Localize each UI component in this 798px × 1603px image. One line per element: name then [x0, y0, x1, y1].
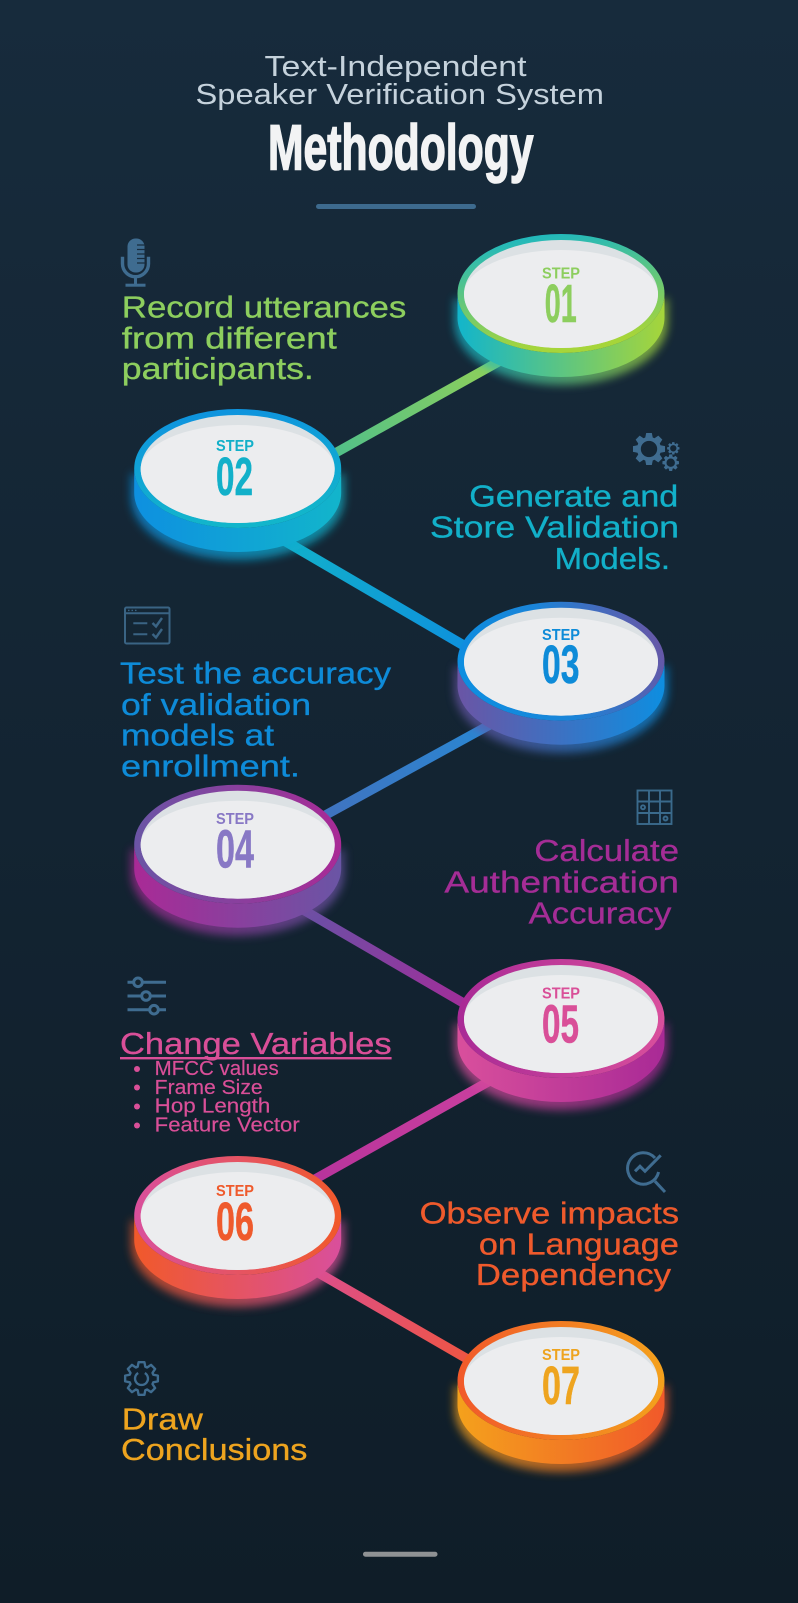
connector 4 to 5 [300, 908, 472, 1008]
variable list: Frame Size [155, 1077, 263, 1099]
step 01 disk: STEP [542, 265, 580, 282]
step 01 text: from different [122, 321, 337, 355]
step 04 text: Accuracy [529, 896, 672, 930]
step 02 text [430, 480, 679, 576]
step 07 disk [458, 1321, 664, 1469]
step 01 disk [458, 234, 664, 382]
title block [196, 51, 604, 184]
icon: checklist window [125, 608, 170, 644]
step 07 text [121, 1402, 307, 1467]
bottom bar [363, 1552, 438, 1557]
step 07 disk: STEP [542, 1347, 580, 1364]
step 04 text: Calculate [534, 834, 679, 868]
step 06 text [420, 1196, 679, 1292]
step 02 disk: STEP [216, 438, 254, 455]
icon: analytics magnifier [628, 1153, 665, 1192]
step 04 disk: 04 [216, 819, 254, 879]
connector lines [285, 361, 500, 1364]
step 03 text [120, 656, 392, 784]
step 06 text: Dependency [476, 1258, 672, 1292]
step 05 disk [458, 959, 664, 1107]
icon: gears [633, 433, 680, 471]
connector 3 to 4 [322, 722, 495, 817]
icon: gear outline [125, 1362, 158, 1395]
icon: microphone [122, 238, 148, 287]
variable list: MFCC values [155, 1058, 279, 1080]
connector 6 to 7 [310, 1268, 476, 1364]
step 02 text: Models. [555, 542, 670, 576]
heading: Methodology [268, 112, 534, 184]
icon: grid [638, 790, 672, 824]
step 01 text [122, 290, 406, 386]
step 01 text: participants. [122, 352, 314, 386]
title divider [316, 204, 476, 209]
step 04 text [444, 834, 679, 930]
step 07 disk: 07 [542, 1356, 580, 1416]
step 06 disk: STEP [216, 1183, 254, 1200]
step 03 text: of validation [121, 688, 311, 722]
variable list: Feature Vector [155, 1115, 300, 1137]
variable list: Hop Length [155, 1096, 270, 1118]
variable list [134, 1058, 300, 1137]
step 03 disk: STEP [542, 627, 580, 644]
subtitle line 2: Speaker Verification System [196, 79, 604, 111]
step 07 text: Conclusions [121, 1433, 307, 1467]
step 01 disk: 01 [545, 274, 577, 334]
step 03 text: enrollment. [121, 750, 300, 784]
step 04 disk: STEP [216, 811, 254, 828]
step 05 disk: 05 [542, 994, 579, 1054]
step 01 text: Record utterances [122, 290, 406, 324]
connector 1 to 2 [330, 361, 500, 456]
step 02 disk [134, 409, 341, 557]
step 03 text: Test the accuracy [120, 656, 392, 690]
connector 5 to 6 [310, 1078, 495, 1182]
step 03 disk: 03 [542, 635, 580, 695]
step 04 text: Authentication [444, 865, 679, 899]
step 06 disk [134, 1156, 341, 1304]
connector 2 to 3 [285, 541, 475, 652]
step 04 disk [134, 785, 341, 933]
step 02 text: Store Validation [430, 511, 679, 545]
step 05 heading: Change Variables [120, 1027, 392, 1061]
step 06 text: Observe impacts [420, 1196, 679, 1230]
icon: sliders [128, 978, 166, 1014]
step 07 text: Draw [122, 1402, 204, 1436]
step 05 disk: STEP [542, 985, 580, 1002]
step 02 text: Generate and [469, 480, 678, 514]
step 06 text: on Language [479, 1227, 679, 1261]
step 02 disk: 02 [216, 447, 253, 507]
subtitle line 1: Text-Independent [264, 51, 526, 83]
step 06 disk: 06 [216, 1192, 254, 1252]
step 05 text [120, 1027, 392, 1137]
step 03 disk [458, 602, 664, 750]
step 03 text: models at [121, 719, 275, 753]
